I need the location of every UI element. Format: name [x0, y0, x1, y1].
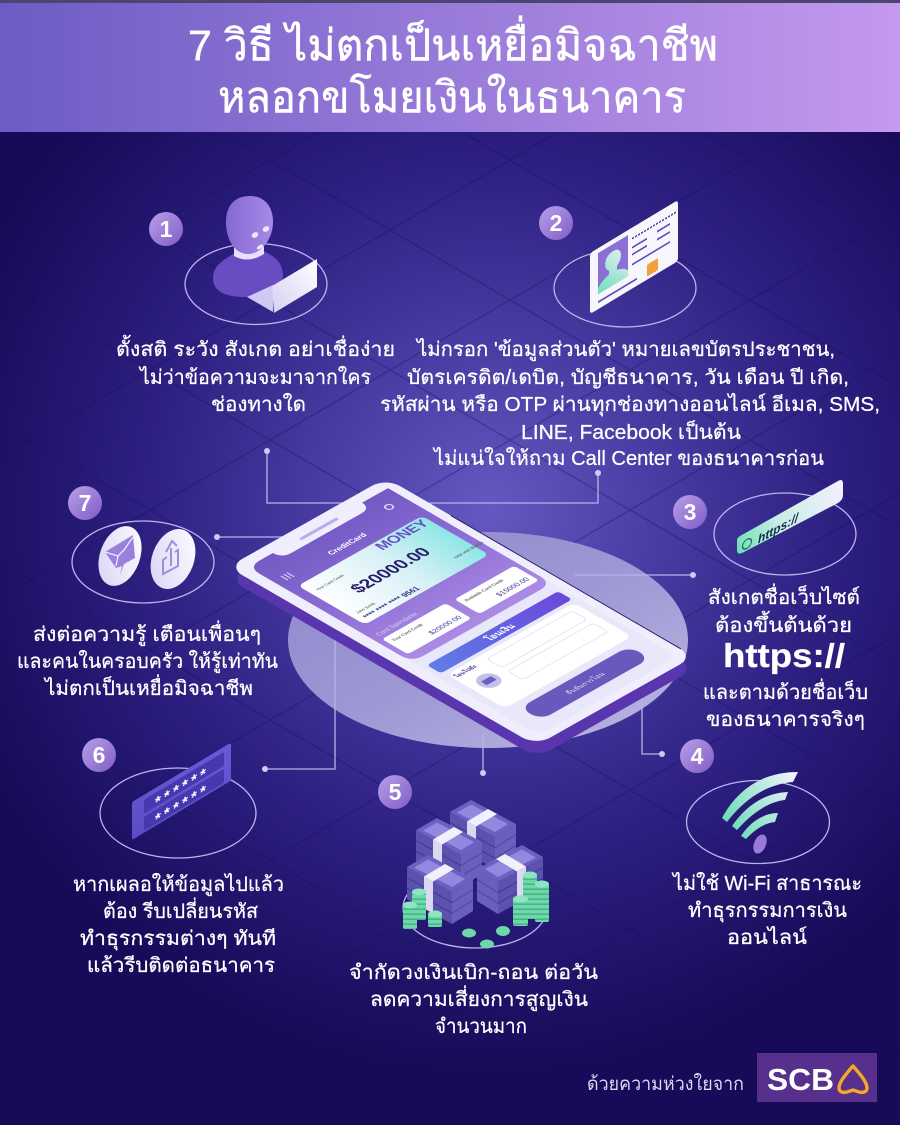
title: 7 วิธี ไม่ตกเป็นเหยื่อมิจฉาชีพ [188, 16, 718, 70]
icon: password panel: ****** [155, 780, 209, 829]
icon: wifi [722, 772, 798, 856]
icon: https address bar [737, 480, 843, 555]
transfer bar [427, 591, 572, 673]
phone body side [229, 490, 695, 758]
balance card [298, 511, 498, 625]
number badge 4: 4 [691, 743, 704, 769]
transfer bar: โอนเงิน [481, 622, 518, 643]
text 5: จำนวนมาก [435, 1016, 527, 1038]
confirm button: ยืนยันการโอน [563, 671, 608, 696]
text 3 [703, 583, 868, 731]
number badge 4 [680, 739, 714, 773]
title: หลอกขโมยเงินในธนาคาร [218, 73, 686, 122]
balance card: $20000.00 [345, 545, 435, 596]
icon: password panel [132, 743, 231, 843]
text 4 [671, 872, 862, 949]
text 5 [349, 962, 598, 1038]
form panel: โอนไปยัง [451, 664, 479, 680]
icon: money stacks and coins [403, 800, 549, 948]
step 3 [673, 480, 868, 731]
text 7: ไม่ตกเป็นเหยื่อมิจฉาชีพ [43, 674, 253, 700]
number badge 5 [378, 775, 412, 809]
number badge 6: 6 [93, 742, 105, 768]
credit box right: Available Card Credit [463, 578, 505, 602]
credit box left [382, 603, 471, 654]
credit box right [454, 566, 539, 614]
number badge 1 [149, 212, 183, 246]
icon: https address bar: https:// [758, 509, 799, 546]
phone illustration [228, 478, 695, 758]
SCB logo [757, 1053, 877, 1102]
icon: password panel: ****** [155, 763, 209, 812]
step 4 [671, 739, 862, 949]
number badge 1: 1 [160, 216, 173, 242]
text 2: บัตรเครดิต/เดบิต, บัญชีธนาคาร, วัน เดือน ปี เกิด, [407, 367, 849, 389]
text 3: และตามด้วยชื่อเว็บ [703, 678, 868, 704]
phone screen: CreditCard [325, 532, 369, 556]
balance card: MONEY [371, 517, 433, 553]
balance card: Valid until 08/2021 [452, 540, 486, 559]
SCB logo: SCB [767, 1062, 834, 1097]
step 7 [17, 486, 278, 700]
balance card: Your Card Credit [314, 573, 346, 591]
text 6 [73, 873, 284, 977]
text 2: รหัสผ่าน หรือ OTP ผ่านทุกช่องทางออนไลน์ อีเมล, SMS, [380, 393, 880, 417]
text 6: หากเผลอให้ข้อมูลไปแล้ว [73, 873, 284, 897]
text 1: ไม่ว่าข้อความจะมาจากใคร [138, 366, 371, 389]
form panel [447, 603, 632, 708]
text 3: ของธนาคารจริงๆ [706, 709, 865, 731]
text 7: และคนในครอบครัว ให้รู้เท่าทัน [17, 650, 278, 674]
number badge 5: 5 [389, 779, 402, 805]
text 6: ทำธุรกรรมต่างๆ ทันที [80, 928, 276, 951]
text 5: ลดความเสี่ยงการสูญเงิน [370, 985, 588, 1012]
platform ellipse behind phone [288, 532, 688, 748]
text 1: ตั้งสติ ระวัง สังเกต อย่าเชื่อง่าย [116, 335, 395, 361]
text 3: https:// [723, 637, 845, 674]
text 3: สังเกตชื่อเว็บไซต์ [708, 583, 860, 609]
text 3: ต้องขึ้นต้นด้วย [715, 611, 852, 637]
text 1 [116, 335, 395, 416]
connector lines [214, 448, 696, 776]
phone screen [228, 478, 694, 746]
number badge 2 [539, 206, 573, 240]
text 2 [380, 338, 880, 470]
number badge 2: 2 [550, 210, 562, 236]
text 1: ช่องทางใด [211, 393, 306, 416]
text 6: ต้อง รีบเปลี่ยนรหัส [103, 897, 258, 923]
text 4: ไม่ใช้ Wi-Fi สาธารณะ [671, 872, 862, 895]
number badge 3 [673, 495, 707, 529]
step 5 [349, 775, 598, 1038]
balance card: **** **** **** 9561 [361, 585, 423, 620]
icon: masked man with laptop [213, 196, 317, 313]
number badge 7: 7 [79, 490, 91, 516]
balance card: John Smith [354, 601, 377, 614]
number badge 7 [68, 486, 102, 520]
text 2: ไม่กรอก 'ข้อมูลส่วนตัว' หมายเลขบัตรประชาชน, [415, 338, 835, 362]
step 1 [116, 196, 395, 416]
header banner [0, 0, 900, 132]
text 6: แล้วรีบติดต่อธนาคาร [87, 955, 275, 977]
text 4: ออนไลน์ [727, 926, 807, 949]
text 4: ทำธุรกรรมการเงิน [688, 900, 847, 923]
text 7 [17, 620, 278, 700]
text 2: ไม่แน่ใจให้ถาม Call Center ของธนาคารก่อน [432, 447, 824, 470]
credit box left: Your Card Credit [390, 623, 425, 642]
step 6 [73, 738, 284, 977]
phone screen: Card Spendable [375, 611, 420, 637]
credit box right: $15000.00 [493, 576, 532, 598]
number badge 6 [82, 738, 116, 772]
text 5: จำกัดวงเงินเบิก-ถอน ต่อวัน [349, 962, 598, 984]
icon: share [143, 523, 203, 595]
step 2 [380, 200, 880, 470]
icon: forward mail [91, 520, 149, 592]
confirm button [520, 646, 650, 720]
icon: ID card [590, 200, 678, 314]
text 7: ส่งต่อความรู้ เตือนเพื่อนๆ [33, 620, 261, 647]
number badge 3: 3 [684, 499, 696, 525]
credit box left: $20000.00 [426, 614, 464, 636]
text 2: LINE, Facebook เป็นต้น [521, 419, 741, 444]
title [188, 16, 718, 122]
footer credit text: ด้วยความห่วงใยจาก [587, 1073, 744, 1095]
